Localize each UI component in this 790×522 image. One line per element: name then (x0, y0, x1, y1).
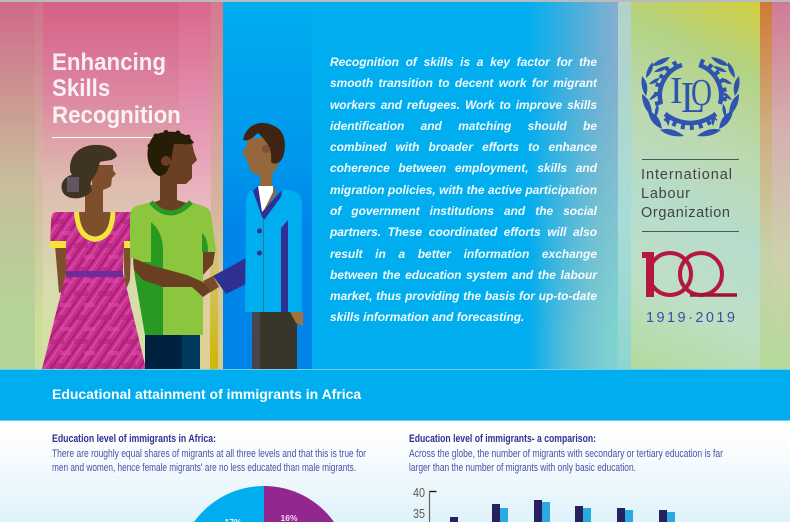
charts and captions (52, 433, 723, 522)
title: Enhancing (52, 49, 166, 76)
caption: Africa: Education level of immigrants in Africa: (52, 433, 216, 445)
man in blue jacket (203, 123, 303, 369)
intro paragraph: smooth transition to decent work for migrant (330, 76, 597, 90)
intro paragraph: between the education system and the labour (330, 268, 597, 282)
intro paragraph: result in a better information exchange (330, 247, 597, 261)
bar chart: 35 (413, 506, 425, 521)
title (52, 49, 181, 138)
section band (0, 369, 790, 420)
intro paragraph: combined with broader efforts to enhance (330, 140, 597, 154)
title: Recognition (52, 102, 181, 129)
section heading: Educational attainment of immigrants in Africa (52, 386, 361, 402)
caption: comparison (409, 433, 723, 474)
icon: ILO wreath (642, 57, 740, 136)
bar chart (413, 485, 675, 522)
organization name: Labour (641, 186, 690, 202)
intro paragraph: of government institutions and the social (330, 204, 597, 218)
illustration: three people shaking hands (42, 122, 303, 369)
organization name (641, 159, 739, 232)
hero background (0, 2, 790, 369)
intro paragraph: identification and matching should be (330, 119, 597, 133)
bar chart: 40 (413, 485, 425, 500)
top edge line (0, 0, 790, 2)
intro paragraph: Recognition of skills is a key factor for the (330, 55, 597, 69)
caption: comparison: larger than the number of migrants with only basic education. (409, 462, 636, 474)
caption: comparison: Education level of immigrants- a comparison: (409, 433, 596, 445)
intro paragraph (330, 55, 598, 324)
ILO letters: I (670, 70, 683, 112)
ILO letters: O (691, 72, 712, 114)
intro paragraph: skills information and forecasting. (330, 310, 524, 324)
years: 1919·2019 (646, 310, 735, 326)
intro paragraph: coherence between employment, skills and (330, 161, 597, 175)
caption: Africa: men and women, hence female migrants' are no less educated than male migrants. (52, 462, 356, 474)
man in green shirt (130, 130, 216, 369)
title: Skills (52, 75, 110, 102)
ILO letters: L (681, 73, 705, 122)
icon: ILO gear (658, 62, 723, 128)
caption: Africa: There are roughly equal shares of migrants at all three levels and that this is true for (52, 448, 366, 460)
ILO logo and centenary mark (641, 57, 740, 326)
intro paragraph: workers and refugees. Work to improve skills (330, 98, 597, 112)
pie chart (194, 486, 334, 522)
organization name: International (641, 167, 732, 183)
caption: Africa (52, 433, 366, 474)
intro paragraph: partners. These coordinated efforts will also (330, 225, 597, 239)
intro paragraph: migration policies, with the active participation (330, 183, 597, 197)
woman (42, 145, 146, 369)
organization name: Organization (641, 205, 730, 221)
ILO letters (670, 70, 712, 122)
lower background (0, 420, 790, 522)
intro paragraph: market, thus providing the basis for up-to-date (330, 289, 597, 303)
centenary 100 mark (642, 252, 737, 297)
